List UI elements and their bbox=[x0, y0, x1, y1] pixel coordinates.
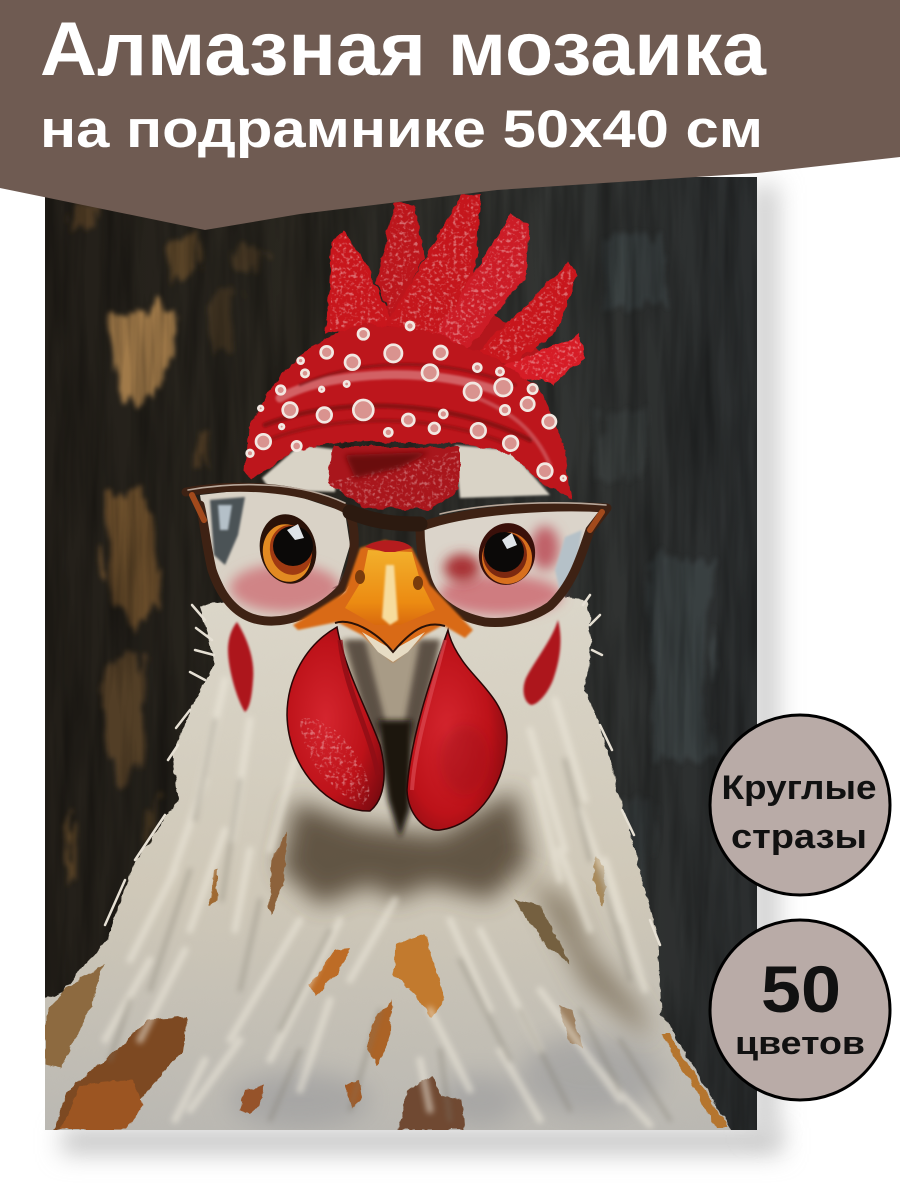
lens reflections bbox=[210, 497, 245, 565]
title: Алмазная мозаика bbox=[40, 7, 767, 92]
cere bbox=[365, 540, 412, 552]
comb bbox=[326, 193, 584, 384]
subtitle: на подрамнике 50х40 см bbox=[40, 100, 763, 159]
badge: round rhinestones bbox=[710, 715, 890, 895]
head feathers under bandana bbox=[262, 445, 550, 498]
badge: 50 colors: цветов bbox=[735, 1025, 865, 1061]
bandana pale folds bbox=[265, 364, 550, 465]
glasses frame bbox=[186, 485, 607, 622]
rooster body feathers bbox=[30, 580, 740, 1145]
grey-blue brush strokes bbox=[595, 235, 710, 920]
comb highlights bbox=[330, 195, 582, 382]
right eye bbox=[478, 523, 536, 585]
bandana knot bbox=[327, 447, 460, 510]
side wattles bbox=[228, 620, 560, 712]
chest shadow under wattles bbox=[280, 790, 530, 905]
nostrils bbox=[355, 570, 365, 584]
canvas shadow bbox=[62, 185, 782, 1154]
rust feather spots bbox=[45, 830, 728, 1130]
cream feather strokes bbox=[105, 680, 650, 1125]
pink cheeks bbox=[230, 564, 340, 612]
badge: round rhinestones: Круглые bbox=[722, 769, 876, 807]
glasses and eyes bbox=[186, 485, 607, 622]
ochre paint patches bbox=[66, 203, 265, 880]
lens fill left bbox=[200, 492, 350, 602]
top banner bbox=[0, 0, 900, 230]
edge feather fringe bbox=[105, 595, 660, 945]
painting canvas bbox=[30, 177, 757, 1145]
grey feather strokes bbox=[110, 720, 670, 1120]
left eye bbox=[260, 514, 316, 584]
badge: 50 colors: 50 bbox=[761, 952, 841, 1026]
frame highlight bbox=[188, 485, 345, 503]
painting background bbox=[45, 177, 757, 1130]
white polka dots bbox=[247, 322, 566, 481]
lens fill right bbox=[424, 511, 598, 596]
right neck shading bbox=[522, 870, 656, 1040]
lower grey shading bbox=[230, 1035, 660, 1128]
right wattle bbox=[407, 630, 507, 830]
left wattle bbox=[287, 627, 384, 811]
frame bridge bbox=[350, 512, 420, 524]
bandana bbox=[245, 322, 572, 510]
throat feathers bbox=[340, 640, 440, 838]
badge: round rhinestones: стразы bbox=[731, 818, 867, 856]
badge: 50 colors bbox=[710, 920, 890, 1100]
beak bbox=[293, 540, 473, 662]
vertical brush streaks bbox=[45, 177, 757, 1130]
